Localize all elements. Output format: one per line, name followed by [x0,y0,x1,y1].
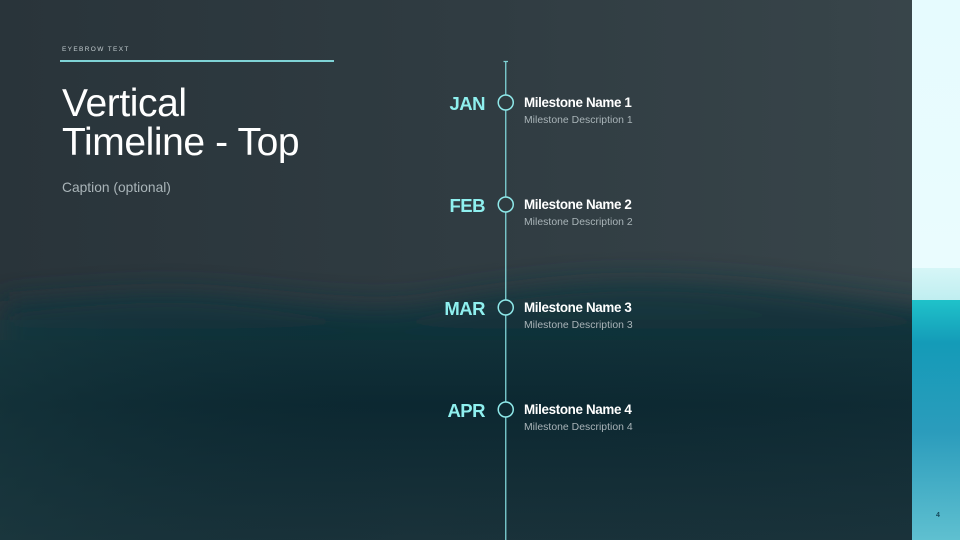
milestone name 1: Milestone Name 1 [524,95,632,110]
milestone name 4: Milestone Name 4 [524,402,632,417]
axis line [504,61,508,540]
month: MAR: MAR [444,298,485,319]
title [62,82,299,164]
timeline [498,60,514,540]
milestone description 4: Milestone Description 4 [524,422,633,433]
month: APR: APR [447,400,485,421]
month: JAN: JAN [449,93,485,114]
milestone description 2: Milestone Description 2 [524,217,633,228]
marker: Apr [498,402,513,417]
milestone description 1: Milestone Description 1 [524,115,633,126]
milestone name 2: Milestone Name 2 [524,197,632,212]
title: Timeline - Top [62,120,299,164]
milestone name 3: Milestone Name 3 [524,300,632,315]
marker: Mar [498,300,513,315]
page number: 4 [936,512,940,519]
marker: Jan [498,95,513,110]
eyebrow: EYEBROW TEXT [62,46,130,53]
milestone description 3: Milestone Description 3 [524,320,633,331]
title: Vertical [62,82,187,125]
eyebrow rule [60,60,334,62]
right image strip [912,0,960,540]
caption: Caption (optional) [62,180,171,195]
month: FEB: FEB [450,195,485,216]
marker: Feb [498,197,513,212]
